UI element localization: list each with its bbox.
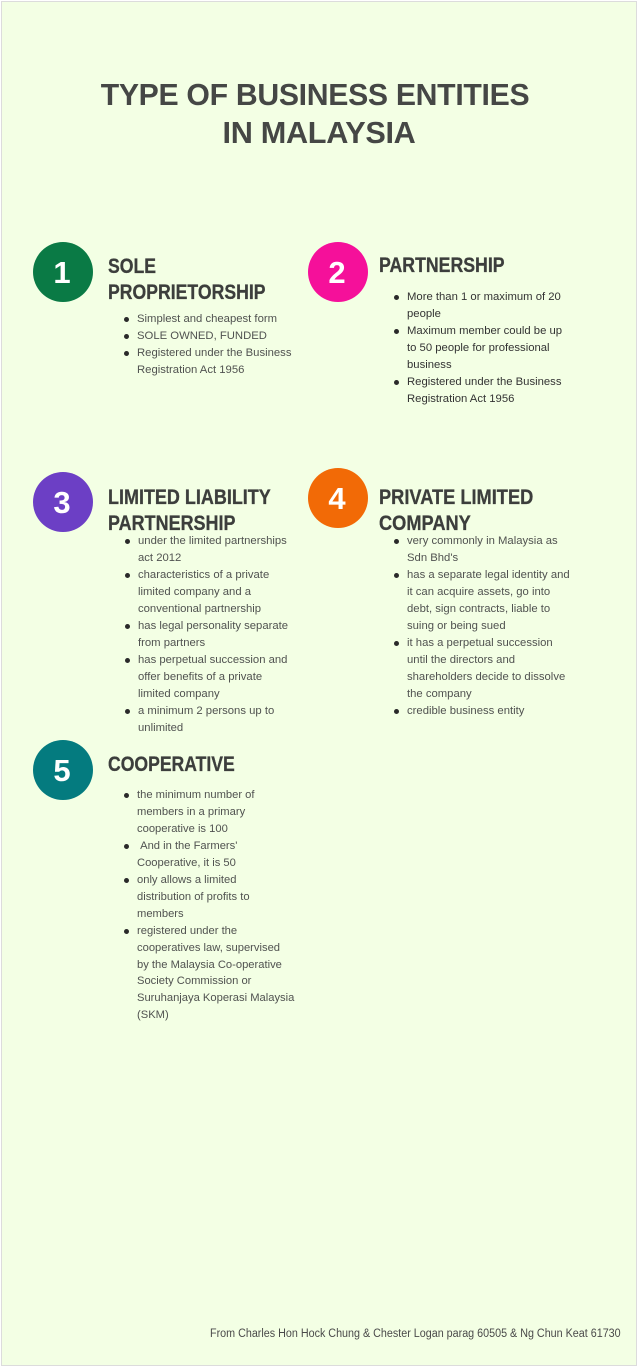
list: cooperative: cooperative is 100	[137, 823, 228, 835]
list: limited liability partnership: under the limited partnerships	[138, 535, 287, 547]
icon: number 1	[33, 242, 93, 302]
list: cooperative: only allows a limited	[137, 874, 236, 886]
list: partnership: people	[407, 308, 441, 320]
list: sole proprietorship: SOLE OWNED, FUNDED	[137, 330, 267, 342]
heading: private limited company: COMPANY	[379, 512, 471, 535]
list: cooperative: And in the Farmers'	[140, 840, 237, 852]
list: limited liability partnership: offer benefits of a private	[138, 671, 262, 683]
list: partnership: More than 1 or maximum of 20	[407, 291, 561, 303]
heading: limited liability partnership: LIMITED LIABILITY	[108, 486, 271, 509]
heading: limited liability partnership	[108, 486, 271, 535]
list: private limited company: Sdn Bhd's	[407, 552, 458, 564]
list: private limited company: until the directors and	[407, 654, 515, 666]
list: limited liability partnership: has perpetual succession and	[138, 654, 287, 666]
list: sole proprietorship	[124, 313, 292, 376]
list: sole proprietorship: Registered under the Business	[137, 347, 291, 359]
list: cooperative: members in a primary	[137, 806, 245, 818]
list: cooperative: members	[137, 908, 184, 920]
list: private limited company: debt, sign contracts, liable to	[407, 603, 550, 615]
list: partnership: Registered under the Business	[407, 376, 561, 388]
list: private limited company: credible business entity	[407, 705, 524, 717]
list: limited liability partnership: conventional partnership	[138, 603, 261, 615]
list: limited liability partnership: limited company	[138, 688, 220, 700]
list: cooperative: by the Malaysia Co-operative	[137, 959, 282, 971]
list: private limited company: it can acquire assets, go into	[407, 586, 550, 598]
icon: number 5	[33, 740, 93, 800]
heading: private limited company	[379, 486, 533, 535]
list: private limited company: has a separate legal identity and	[407, 569, 570, 581]
list: limited liability partnership	[125, 535, 288, 734]
list: private limited company	[394, 535, 570, 717]
list: sole proprietorship: Registration Act 1956	[137, 364, 244, 376]
list: private limited company: it has a perpetual succession	[407, 637, 553, 649]
list: limited liability partnership: characteristics of a private	[138, 569, 269, 581]
icon: number 3: 3	[53, 485, 71, 520]
icon: number 5: 5	[53, 753, 71, 788]
list: limited liability partnership: from partners	[138, 637, 205, 649]
heading: private limited company: PRIVATE LIMITED	[379, 486, 533, 509]
list: partnership	[394, 291, 562, 405]
list: private limited company: suing or being sued	[407, 620, 506, 632]
heading: sole proprietorship	[108, 255, 265, 304]
heading: sole proprietorship: SOLE	[108, 255, 156, 278]
list: limited liability partnership: has legal personality separate	[138, 620, 288, 632]
heading: partnership: PARTNERSHIP	[379, 254, 505, 277]
list: cooperative: the minimum number of	[137, 789, 255, 801]
list: cooperative	[124, 789, 294, 1021]
list: limited liability partnership: act 2012	[138, 552, 181, 564]
list: private limited company: the company	[407, 688, 472, 700]
footer credits: From Charles Hon Hock Chung & Chester Logan parag 60505 & Ng Chun Keat 61730	[210, 1328, 621, 1340]
list: limited liability partnership: a minimum 2 persons up to	[138, 705, 274, 717]
title	[101, 79, 529, 150]
icon: number 4: 4	[328, 481, 346, 516]
list: partnership: Maximum member could be up	[407, 325, 562, 337]
heading: sole proprietorship: PROPRIETORSHIP	[108, 281, 265, 304]
heading: cooperative: COOPERATIVE	[108, 753, 235, 776]
list: cooperative: cooperatives law, supervised	[137, 942, 280, 954]
heading: limited liability partnership: PARTNERSHIP	[108, 512, 236, 535]
list: limited liability partnership: limited company and a	[138, 586, 251, 598]
icon: number 4	[308, 468, 368, 528]
list: partnership: to 50 people for professional	[407, 342, 550, 354]
icon: number 3	[33, 472, 93, 532]
list: sole proprietorship: Simplest and cheapest form	[137, 313, 277, 325]
list: private limited company: very commonly in Malaysia as	[407, 535, 558, 547]
list: cooperative: registered under the	[137, 925, 237, 937]
icon: number 1: 1	[53, 255, 71, 290]
title: TYPE OF BUSINESS ENTITIES	[101, 79, 529, 112]
list: private limited company: shareholders decide to dissolve	[407, 671, 565, 683]
list: cooperative: (SKM)	[137, 1009, 169, 1021]
title: IN MALAYSIA	[222, 117, 416, 150]
list: cooperative: Society Commission or	[137, 975, 251, 987]
icon: number 2	[308, 242, 368, 302]
list: cooperative: Suruhanjaya Koperasi Malaysia	[137, 992, 294, 1004]
list: cooperative: distribution of profits to	[137, 891, 250, 903]
icon: number 2: 2	[328, 255, 346, 290]
list: limited liability partnership: unlimited	[138, 722, 183, 734]
list: cooperative: Cooperative, it is 50	[137, 857, 236, 869]
list: partnership: Registration Act 1956	[407, 393, 514, 405]
list: partnership: business	[407, 359, 452, 371]
